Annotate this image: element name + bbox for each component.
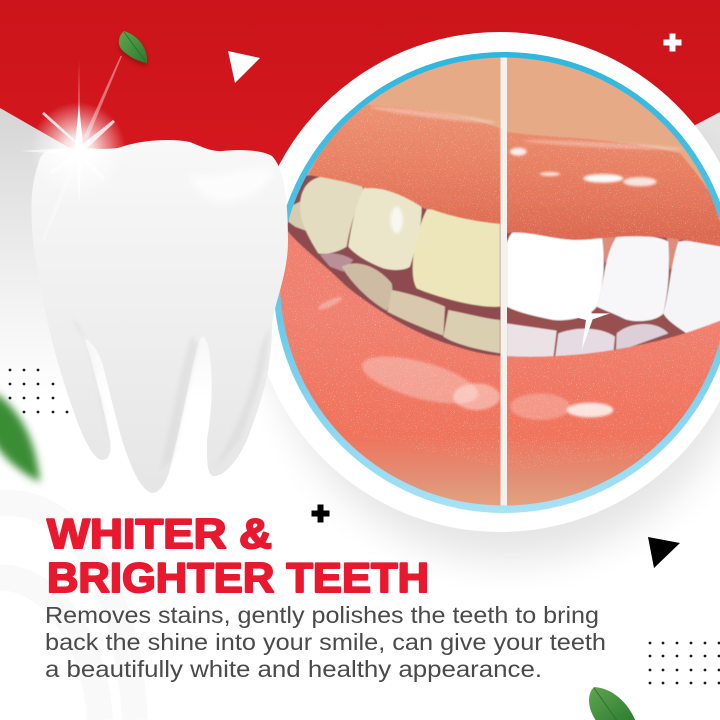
blue circle ring — [274, 52, 720, 513]
divider line — [500, 50, 507, 520]
lip speckle texture — [280, 100, 720, 490]
background curved band — [0, 503, 135, 720]
upper lip left — [308, 105, 501, 224]
heading: BRIGHTER TEETH — [47, 554, 429, 601]
sparkle on tooth — [20, 56, 126, 240]
right mouth interior — [505, 223, 720, 362]
photo: smile before and after — [270, 50, 720, 523]
tooth — [31, 140, 288, 493]
leaf: left blurred — [0, 392, 40, 482]
body text — [45, 602, 606, 682]
white circle ring — [250, 32, 720, 532]
heading — [47, 510, 429, 601]
whitened lower teeth — [507, 323, 668, 358]
stained lower teeth — [342, 263, 500, 353]
upper lip right — [505, 132, 720, 247]
left mouth interior — [288, 174, 500, 356]
whitened upper teeth — [507, 230, 720, 333]
triangle: white — [228, 51, 260, 83]
lower lip right — [507, 320, 720, 506]
icon: white plus — [664, 34, 682, 52]
lower lip left — [273, 227, 501, 523]
body text: back the shine into your smile, can give your teeth — [45, 629, 606, 655]
body text: a beautifully white and healthy appearance. — [45, 656, 542, 682]
leaf: bottom — [589, 687, 636, 720]
dots: right — [649, 642, 720, 684]
circle shadow — [270, 70, 720, 560]
heading: WHITER & — [47, 510, 272, 557]
dots: left — [9, 369, 68, 413]
icon: black plus — [312, 504, 330, 522]
leaf: top — [119, 31, 147, 66]
red header shape — [0, 0, 720, 280]
sparkle on white teeth — [577, 311, 610, 350]
lower left gum shadow — [320, 253, 353, 272]
body text: Removes stains, gently polishes the teeth to bring — [45, 602, 599, 628]
stained upper teeth — [300, 176, 500, 307]
triangle: black — [648, 537, 680, 568]
lip highlights — [317, 104, 683, 420]
right grey panel — [560, 112, 720, 360]
right gums — [602, 236, 680, 270]
stained far-left tooth — [288, 201, 306, 232]
